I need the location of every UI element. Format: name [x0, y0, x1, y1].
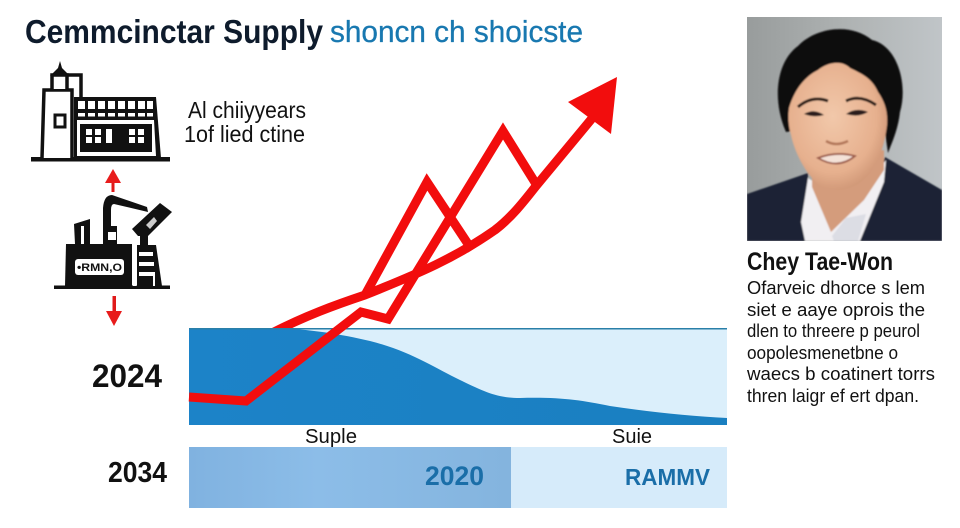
- text block: AI chip note: Al chiiyyears: [188, 97, 306, 123]
- portrait: hair: [778, 29, 903, 153]
- portrait photo: [747, 17, 942, 241]
- bar: lower timeline: [189, 447, 727, 508]
- chart area: supply curve: [189, 328, 727, 425]
- label: side: Suie: [612, 426, 652, 448]
- name: Chey Tae-Won: Chey Tae-Won: [747, 248, 893, 276]
- icon: chip factory with robot arm: •RMN,O: [77, 262, 122, 274]
- chart: supply and demand: [189, 77, 727, 425]
- icon: chip fabrication building: [31, 61, 170, 162]
- bar: lower timeline: 2020: [425, 461, 484, 491]
- portrait: neck: [812, 150, 884, 232]
- arrow: down: [106, 296, 122, 326]
- text block: biography: waecs b coatinert torrs: [746, 364, 935, 384]
- portrait: nose: [826, 141, 848, 144]
- chart line: upper red curve and peak: [272, 116, 594, 333]
- portrait: brows: [798, 98, 876, 107]
- portrait: face: [788, 63, 887, 190]
- text block: AI chip note: 1of lied ctine: [184, 121, 305, 147]
- label: 2024: 2024: [92, 358, 162, 394]
- bar: lower timeline: RAMMV: [625, 464, 711, 490]
- text block: biography: thren laigr ef ert dpan.: [747, 386, 919, 406]
- arrow head: [568, 77, 617, 134]
- arrow: up: [105, 169, 121, 192]
- portrait: smile: [818, 154, 855, 164]
- portrait: shirt: [801, 160, 886, 241]
- text block: biography: dlen to threere p peurol: [747, 321, 920, 341]
- text block: AI chip note: [184, 97, 306, 147]
- title: [25, 13, 583, 50]
- chart area: light background: [189, 329, 727, 425]
- text block: biography: oopolesmenetbne o: [747, 343, 898, 363]
- title: shoncn ch shoicste: [330, 14, 583, 49]
- text block: biography: [746, 278, 935, 406]
- portrait: eyes: [804, 110, 868, 116]
- label: 2034: 2034: [108, 457, 167, 489]
- title: Cemmcinctar Supply: [25, 13, 324, 50]
- icon: chip factory with robot arm: [54, 195, 172, 289]
- text block: biography: siet e aaye oprois the: [747, 300, 925, 320]
- portrait: jacket: [747, 173, 808, 241]
- text block: biography: Ofarveic dhorce s lem: [747, 278, 925, 298]
- label: supply: Suple: [305, 426, 357, 448]
- chart line: red jagged growth line: [189, 131, 536, 401]
